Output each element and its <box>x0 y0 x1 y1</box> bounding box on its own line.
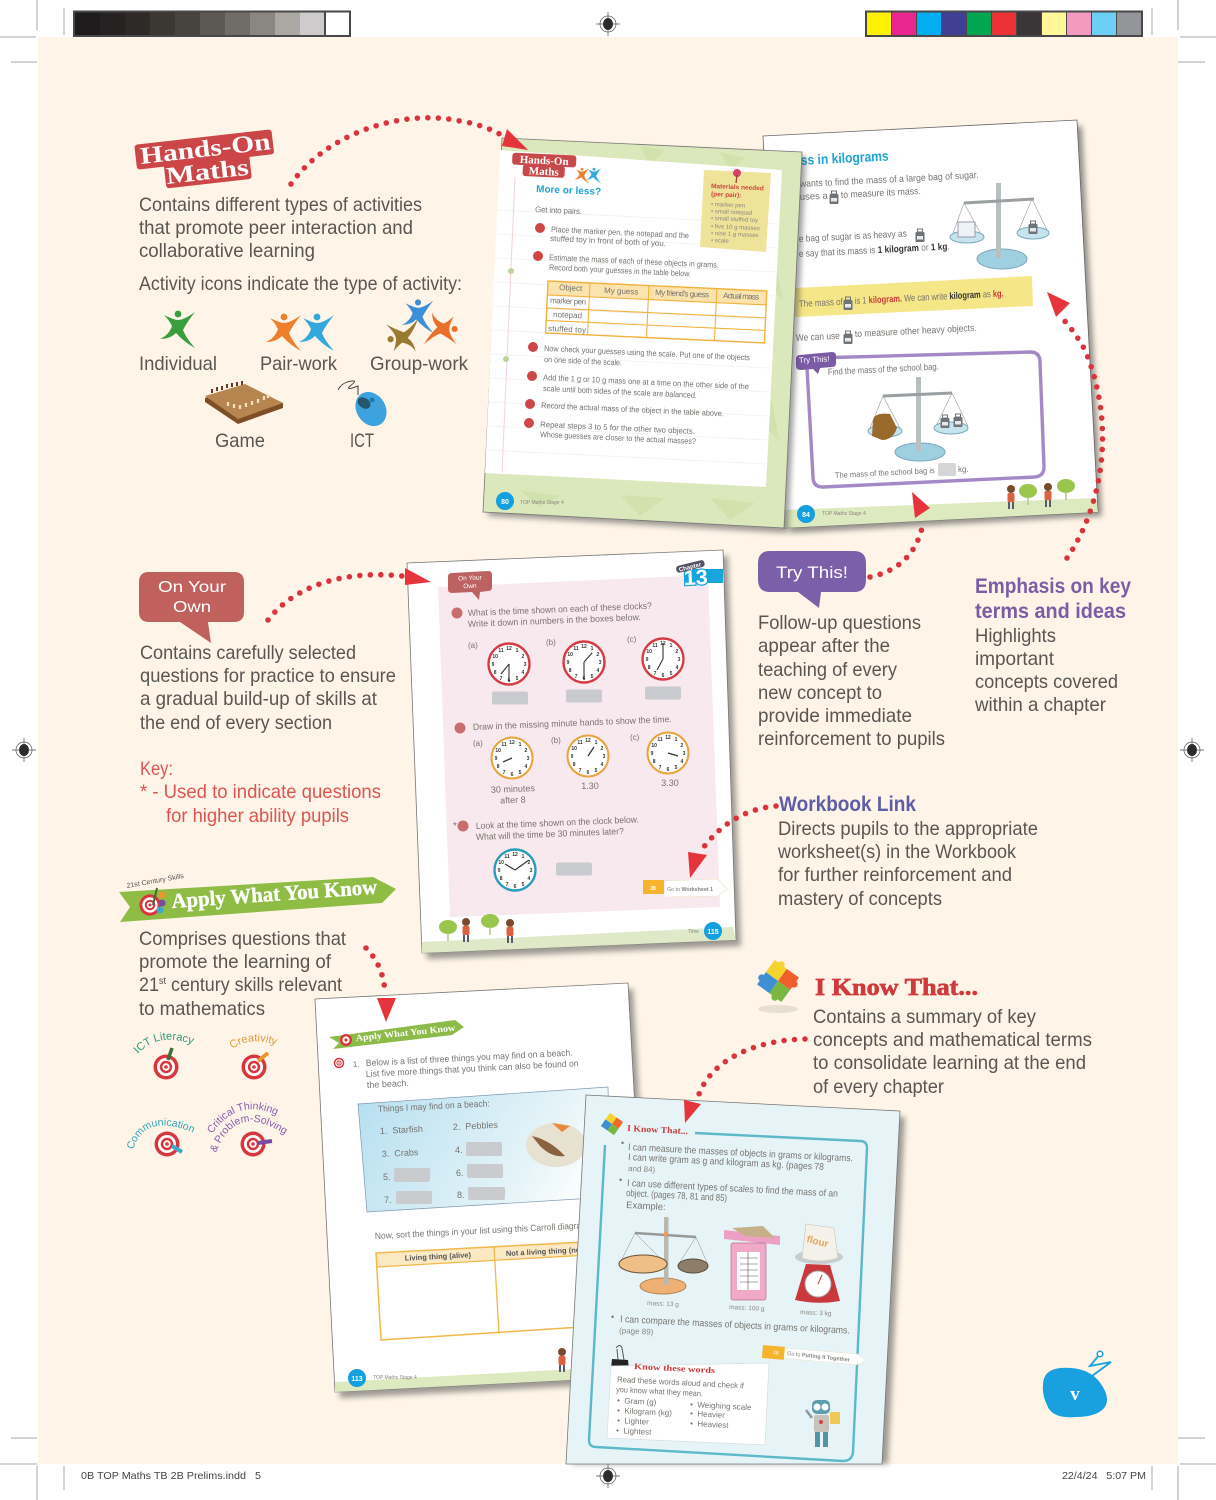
heading: apply what you know banner: 21st Century Skills <box>126 873 185 890</box>
beach panel: 7. <box>384 1195 392 1205</box>
guess table: My friend's guess <box>655 288 709 299</box>
lesson text: e say that its mass is 1 kilogram or 1 kg. <box>799 241 950 260</box>
icon: game <box>205 381 283 452</box>
try this question: Find the mass of the school bag. <box>828 361 939 377</box>
question 1: (b) <box>546 638 556 647</box>
section title: I Know That... <box>627 1123 688 1136</box>
text: apply description: Comprises questions that <box>139 928 347 950</box>
chapter label <box>675 559 723 590</box>
arrow: try this to page <box>870 492 930 577</box>
apply banner small: Apply What You Know <box>355 1023 456 1043</box>
text: try this description: Follow-up questions <box>758 612 921 634</box>
icon: pair-work: Pair-work <box>260 353 337 375</box>
balance scale <box>619 1217 708 1294</box>
text: apply description <box>139 928 347 1020</box>
guess table <box>546 281 767 343</box>
guess table: Actual mass <box>723 291 759 302</box>
question text: 1. <box>353 1060 360 1069</box>
usage sentence: We can use <box>796 331 840 344</box>
beach panel: 5. <box>383 1172 391 1182</box>
heading: hands-on maths: Maths <box>165 155 250 190</box>
icon: puzzle pieces <box>752 955 804 1013</box>
text: I know that description: Contains a summary of key <box>813 1006 1036 1028</box>
panel: textbook page I know that <box>566 1095 905 1464</box>
page number: 115 <box>707 929 719 936</box>
question 1: What is the time shown on each of these clocks? <box>468 601 652 618</box>
text: on your own description: a gradual build-up of skills at <box>140 688 378 710</box>
text: hands-on description: Contains different types of activities <box>139 194 422 216</box>
question 3: * <box>453 821 457 832</box>
summary text <box>611 1138 853 1337</box>
footer slug right: 22/4/24 5:07 PM <box>1062 1470 1146 1482</box>
heading: I know that: I Know That... <box>815 975 978 1001</box>
scale captions: mass: 3 kg <box>800 1309 832 1318</box>
panel: textbook page hands-on activity <box>483 138 806 533</box>
question 2 <box>454 714 688 806</box>
text: key: Key: <box>140 758 173 780</box>
heading: emphasis on key terms: terms and ideas <box>975 600 1126 623</box>
scale captions <box>647 1300 832 1318</box>
text: on your own description <box>140 642 396 734</box>
icon: critical thinking: & Problem-Solving <box>210 1114 288 1152</box>
flour scale: flour <box>805 1234 830 1250</box>
flour scale <box>795 1224 843 1303</box>
heading: emphasis on key terms: Emphasis on key <box>975 575 1131 598</box>
on your own tag: On Your <box>458 574 483 582</box>
sticky note: materials: • nine 1 g masses <box>711 231 759 239</box>
try this tag <box>796 352 836 374</box>
icon: individual: Individual <box>139 353 217 375</box>
chapter label: 13 <box>683 566 708 590</box>
beach panel <box>358 1087 610 1212</box>
text: apply description: promote the learning of <box>139 951 332 973</box>
target icon small <box>334 1058 344 1068</box>
question 3: What will the time be 30 minutes later? <box>476 826 624 842</box>
robot mascot <box>806 1400 840 1447</box>
summary text: and 84) <box>628 1164 656 1174</box>
words card: • Lighter <box>617 1416 649 1427</box>
illustration: trees and children <box>439 914 514 943</box>
heading: hands-on maths <box>138 129 273 190</box>
page number: TOP Maths Stage 4 <box>520 500 564 506</box>
text: I know that description: concepts and mathematical terms <box>813 1029 1092 1051</box>
words card: you know what they mean. <box>616 1385 703 1398</box>
icon: creativity: Creativity <box>230 1033 278 1048</box>
guess table: My guess <box>604 286 639 297</box>
lesson heading: ss in kilograms <box>800 148 889 168</box>
lesson text: e bag of sugar is as heavy as <box>799 229 907 245</box>
activity steps: Whose guesses are closer to the actual masses? <box>540 430 697 446</box>
summary text: I can write gram as g and kilogram as kg. (pages 78 <box>628 1152 824 1173</box>
text: try this description <box>758 612 945 750</box>
go to tag <box>762 1345 866 1365</box>
question text: List five more things that you think can also be found on <box>366 1058 579 1079</box>
balance scale with sugar <box>950 183 1049 269</box>
question 2: after 8 <box>500 794 526 806</box>
heading: apply what you know banner: Apply What You Know <box>171 875 379 913</box>
text: emphasis description: important <box>975 648 1055 670</box>
text: key: for higher ability pupils <box>166 805 349 827</box>
sticky note: materials: • small notepad <box>711 209 752 217</box>
text: workbook description: worksheet(s) in the Workbook <box>777 841 1016 863</box>
beach panel: 1. Starfish <box>380 1124 423 1136</box>
text: on your own description: questions for practice to ensure <box>140 665 396 687</box>
scale captions: mass: 100 g <box>729 1304 765 1313</box>
heading: on your own tag: Own <box>173 599 211 616</box>
workbook tag <box>643 879 727 897</box>
page number <box>688 922 722 940</box>
sticky note: materials: (per pair): <box>711 191 742 199</box>
workbook tag: Go to Worksheet 1 <box>667 887 713 893</box>
activity steps: Estimate the mass of each of these objects in grams. <box>549 253 719 270</box>
lesson text: to measure its mass. <box>841 186 921 201</box>
text: try this description: teaching of every <box>758 659 897 681</box>
text: try this description: reinforcement to pupils <box>758 728 945 750</box>
carroll diagram: Living thing (alive) <box>405 1250 472 1263</box>
icon: bottom corner badge <box>1043 1351 1111 1417</box>
question text: Below is a list of three things you may find on a beach. <box>366 1048 573 1068</box>
workbook tag: 28 <box>650 886 656 892</box>
beach panel: Things I may find on a beach: <box>378 1098 490 1114</box>
question 1: (c) <box>627 635 637 644</box>
arrow: I know that to page <box>684 1039 805 1123</box>
try this tag: Try This! <box>799 354 830 365</box>
chapter label: Chapter <box>679 562 703 574</box>
usage sentence <box>796 323 977 344</box>
beach panel: 3. Crabs <box>382 1147 419 1159</box>
words card: • Kilogram (kg) <box>617 1406 672 1418</box>
activity steps: Add the 1 g or 10 g mass one at a time on the other side of the <box>543 373 750 391</box>
panel: textbook page apply what you know <box>315 983 655 1398</box>
text: key: * - Used to indicate questions <box>140 781 381 803</box>
sticky note: materials: • five 10 g masses <box>711 224 760 232</box>
text: apply description: st <box>159 976 166 987</box>
words card: Know these words <box>634 1361 716 1375</box>
binder clip <box>611 1346 629 1370</box>
page number: TOP Maths Stage 4 <box>373 1375 417 1381</box>
guess table: Object <box>559 283 583 293</box>
answer line: kg. <box>958 465 969 474</box>
text: apply description: century skills relevant <box>166 974 343 996</box>
illustration: child <box>558 1348 566 1372</box>
icon: pair-work <box>260 314 337 375</box>
arrow: emphasis to page <box>1047 292 1103 558</box>
words card: • Heavier <box>690 1409 725 1420</box>
arrow: on your own to page <box>268 568 431 620</box>
question 2: (a) <box>473 739 483 748</box>
activity steps: Now check your guesses using the scale. Put one of the objects <box>544 344 750 362</box>
icon: ICT: ICT <box>350 430 374 452</box>
activity steps: Place the marker pen, the notepad and the <box>551 225 690 240</box>
footer slug left: 0B TOP Maths TB 2B Prelims.indd 5 <box>81 1470 261 1482</box>
text: hands-on description: collaborative learning <box>139 240 315 262</box>
scale captions: mass: 13 g <box>647 1300 679 1309</box>
page number: TOP Maths Stage 4 <box>822 511 866 517</box>
text: apply description: 21 <box>139 974 161 996</box>
activity steps: scale until both sides of the scale are balanced. <box>543 384 697 400</box>
hands-on tag: Maths <box>528 165 560 179</box>
question 1: (a) <box>468 641 478 650</box>
question text: the beach. <box>367 1078 409 1090</box>
text: emphasis description: Highlights <box>975 625 1056 647</box>
text: hands-on description <box>139 194 462 295</box>
activity steps: Record both your guesses in the table below. <box>549 263 691 278</box>
hands-on tag: Hands-On <box>519 154 569 168</box>
summary text: I can compare the masses of objects in grams or kilograms. <box>620 1314 850 1337</box>
heading: apply what you know banner <box>119 873 396 922</box>
question 2: 30 minutes <box>491 783 536 795</box>
sticky note: materials: • marker pen <box>711 202 745 210</box>
carroll diagram: Not a living thing (not alive) <box>506 1244 605 1258</box>
heading: try this tag <box>758 551 866 608</box>
carroll diagram <box>376 1239 644 1340</box>
balance scale with school bag <box>868 377 968 461</box>
text: hands-on description: Activity icons indicate the type of activity: <box>139 273 462 295</box>
text: emphasis description: within a chapter <box>974 694 1106 716</box>
arrow: workbook to page <box>688 806 776 878</box>
on your own tag: Own <box>463 583 477 590</box>
icon: bottom corner badge: v <box>1070 1384 1080 1405</box>
icon: individual <box>139 311 217 375</box>
heading: try this tag: Try This! <box>776 563 848 582</box>
activity title: More or less? <box>536 184 601 198</box>
heading: workbook link: Workbook Link <box>779 793 916 816</box>
on your own tag <box>448 571 492 600</box>
sticky note: materials <box>700 169 771 252</box>
yellow highlight band <box>795 276 1033 317</box>
beach panel: 8. <box>457 1190 465 1200</box>
text: on your own description: Contains carefully selected <box>140 642 356 664</box>
illustration: children and trees <box>1007 479 1075 509</box>
page number <box>496 492 564 510</box>
words card: Read these words aloud and check if <box>617 1375 745 1390</box>
question 1 <box>452 601 684 704</box>
question 3 <box>453 814 639 890</box>
arrow: apply to page <box>366 948 396 1022</box>
summary text: Example: <box>626 1200 666 1213</box>
page number <box>348 1369 417 1387</box>
text: workbook description: mastery of concepts <box>778 888 942 910</box>
icon: group-work: Group-work <box>370 353 468 375</box>
go to tag: Go to Putting It Together <box>787 1351 851 1364</box>
text: emphasis description <box>974 625 1118 716</box>
icon: ICT literacy: ICT Literacy <box>133 1032 194 1054</box>
text: I know that description: to consolidate learning at the end <box>813 1052 1086 1074</box>
icon: group-work <box>370 299 468 375</box>
icon: critical thinking: Critical Thinking <box>208 1102 278 1132</box>
answer line <box>835 463 969 480</box>
question 1: Write it down in numbers in the boxes below. <box>468 612 641 629</box>
teal frame <box>589 1133 867 1461</box>
words card: • Weighing scale <box>690 1400 752 1412</box>
text: apply description: to mathematics <box>139 998 265 1020</box>
text: hands-on description: that promote peer interaction and <box>139 217 413 239</box>
page number: 113 <box>351 1376 363 1383</box>
text: workbook description <box>777 818 1038 910</box>
text: key <box>140 758 381 827</box>
pair icon small <box>574 168 601 183</box>
guess table: stuffed toy <box>548 324 586 335</box>
panel: textbook page kilograms <box>763 120 1102 533</box>
hands-on tag <box>511 153 576 179</box>
panel: textbook page on your own <box>407 550 741 959</box>
beach panel: 2. Pebbles <box>453 1120 499 1132</box>
answer line: The mass of the school bag is <box>835 466 935 480</box>
lesson text: wants to find the mass of a large bag of sugar. <box>799 170 979 190</box>
question 2: (c) <box>630 733 640 742</box>
guess table: marker pen <box>550 296 586 307</box>
beach panel: 4. <box>455 1145 463 1155</box>
yellow highlight band: is 1 kilogram. We can write kilogram as kg. <box>855 288 1004 307</box>
text: try this description: new concept to <box>758 682 882 704</box>
heading: hands-on maths: Hands-On <box>139 129 272 170</box>
beach panel: 6. <box>456 1168 464 1178</box>
words card <box>607 1361 769 1445</box>
text: try this description: provide immediate <box>758 705 912 727</box>
summary text: object. (pages 78, 81 and 85) <box>626 1188 727 1204</box>
question text <box>353 1048 579 1090</box>
text: I know that description <box>813 1006 1092 1098</box>
lesson text: uses a <box>800 191 829 203</box>
sticky note: materials: • scale <box>711 238 730 245</box>
heading: on your own tag: On Your <box>158 579 227 596</box>
question 3: Look at the time shown on the clock below. <box>476 814 639 831</box>
go to tag: 28 <box>773 1350 779 1356</box>
summary text: • <box>621 1138 624 1148</box>
icon: ICT literacy <box>133 1032 194 1080</box>
sticky note: materials: Materials needed <box>711 183 764 192</box>
usage sentence: to measure other heavy objects. <box>855 323 977 340</box>
page number: 84 <box>802 512 810 519</box>
icon: game: Game <box>215 430 265 452</box>
text: on your own description: the end of every section <box>140 712 332 734</box>
text: workbook description: Directs pupils to the appropriate <box>778 818 1038 840</box>
arrow: hands-on maths to page <box>291 118 528 184</box>
lesson text <box>799 170 979 260</box>
text: try this description: appear after the <box>758 635 890 657</box>
question 2: 1.30 <box>581 781 599 791</box>
words card: • Gram (g) <box>617 1396 657 1407</box>
activity steps: Record the actual mass of the object in the table above. <box>541 401 724 418</box>
puzzle icon small <box>601 1113 623 1135</box>
summary text: (page 89) <box>619 1326 654 1337</box>
icon: ICT <box>338 381 393 452</box>
icon: creativity <box>230 1033 278 1080</box>
question 2: Draw in the missing minute hands to show the time. <box>473 714 672 732</box>
question 2: (b) <box>551 736 561 745</box>
words card: • Lightest <box>616 1426 652 1437</box>
heading: emphasis on key terms <box>975 575 1131 623</box>
heading: on your own tag <box>139 572 244 643</box>
text: emphasis description: concepts covered <box>975 671 1118 693</box>
words card: • Heaviest <box>690 1419 729 1430</box>
summary text: I can measure the masses of objects in grams or kilograms. <box>628 1142 853 1164</box>
try this frame <box>807 352 1044 487</box>
question 2: 3.30 <box>661 778 679 788</box>
activity steps: stuffed toy in front of both of you. <box>550 234 666 248</box>
summary text: • <box>611 1312 614 1322</box>
sort instruction: Now, sort the things in your list using this Carroll diagram. <box>375 1220 591 1241</box>
yellow highlight band: The mass of <box>799 297 843 310</box>
sticky note: materials: • small stuffed toy <box>711 216 758 224</box>
activity steps: on one side of the scale. <box>544 355 622 368</box>
guess table: notepad <box>553 310 582 320</box>
page number <box>797 505 866 523</box>
apply banner small <box>329 1020 464 1049</box>
activity steps: Repeat steps 3 to 5 for the other two objects. <box>540 420 695 436</box>
activity steps <box>524 205 750 446</box>
text: workbook description: for further reinforcement and <box>778 864 1012 886</box>
summary text: • <box>619 1175 622 1185</box>
text: I know that description: of every chapter <box>813 1076 944 1098</box>
page number: Time <box>688 929 699 935</box>
page number: 80 <box>501 499 509 506</box>
icon: communication: Communication <box>127 1118 194 1148</box>
kitchen scale <box>724 1226 780 1300</box>
summary text: I can use different types of scales to find the mass of an <box>627 1178 838 1200</box>
activity steps: Get into pairs. <box>535 205 582 216</box>
